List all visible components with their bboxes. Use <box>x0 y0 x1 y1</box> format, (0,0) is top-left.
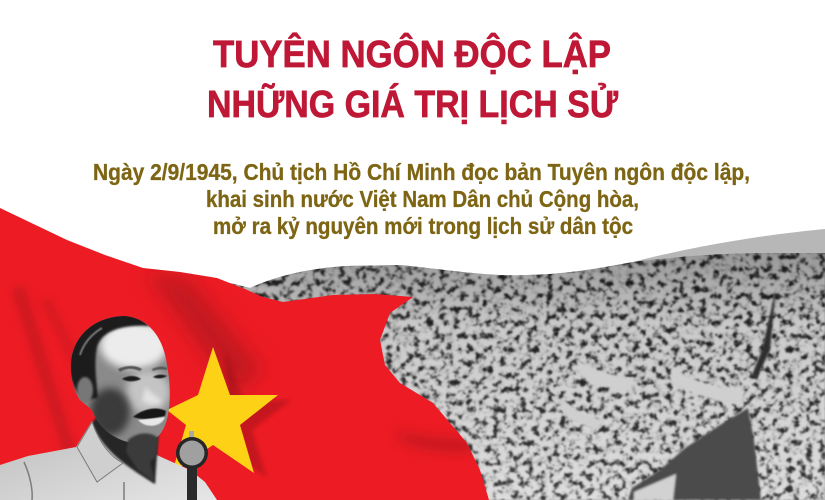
beard <box>126 433 158 483</box>
subtitle: Ngày 2/9/1945, Chủ tịch Hồ Chí Minh đọc bản Tuyên ngôn độc lập, <box>93 159 750 185</box>
pole in the crowd <box>752 288 776 378</box>
grey ribbon above crowd <box>625 229 825 266</box>
forehead light <box>100 321 168 369</box>
portrait of President Ho Chi Minh <box>0 310 217 500</box>
banners in the crowd <box>560 358 745 430</box>
ear <box>77 377 93 403</box>
flag folds <box>12 270 475 475</box>
nose <box>142 386 162 404</box>
red flag <box>0 200 500 500</box>
hair <box>68 314 150 400</box>
mouth <box>138 417 165 426</box>
moustache <box>133 409 166 419</box>
subtitle: mở ra kỷ nguyên mới trong lịch sử dân tộc <box>213 213 633 239</box>
lower face shadow <box>90 388 130 436</box>
dark flag held in the crowd <box>628 408 761 500</box>
title <box>207 31 618 126</box>
jacket collar <box>77 422 123 482</box>
eyes <box>118 366 167 381</box>
title: TUYÊN NGÔN ĐỘC LẬP <box>213 31 611 76</box>
neck shadow <box>92 400 160 484</box>
cheek light <box>126 370 170 414</box>
subtitle: khai sinh nước Việt Nam Dân chủ Cộng hòa, <box>206 186 639 212</box>
yellow star <box>167 347 291 478</box>
title: NHỮNG GIÁ TRỊ LỊCH SỬ <box>207 82 618 126</box>
head with shaded face <box>70 316 170 442</box>
subtitle <box>93 159 750 239</box>
jacket <box>0 421 217 500</box>
hair highlight <box>80 328 102 355</box>
crowd photograph <box>225 250 825 500</box>
microphone <box>176 431 208 500</box>
